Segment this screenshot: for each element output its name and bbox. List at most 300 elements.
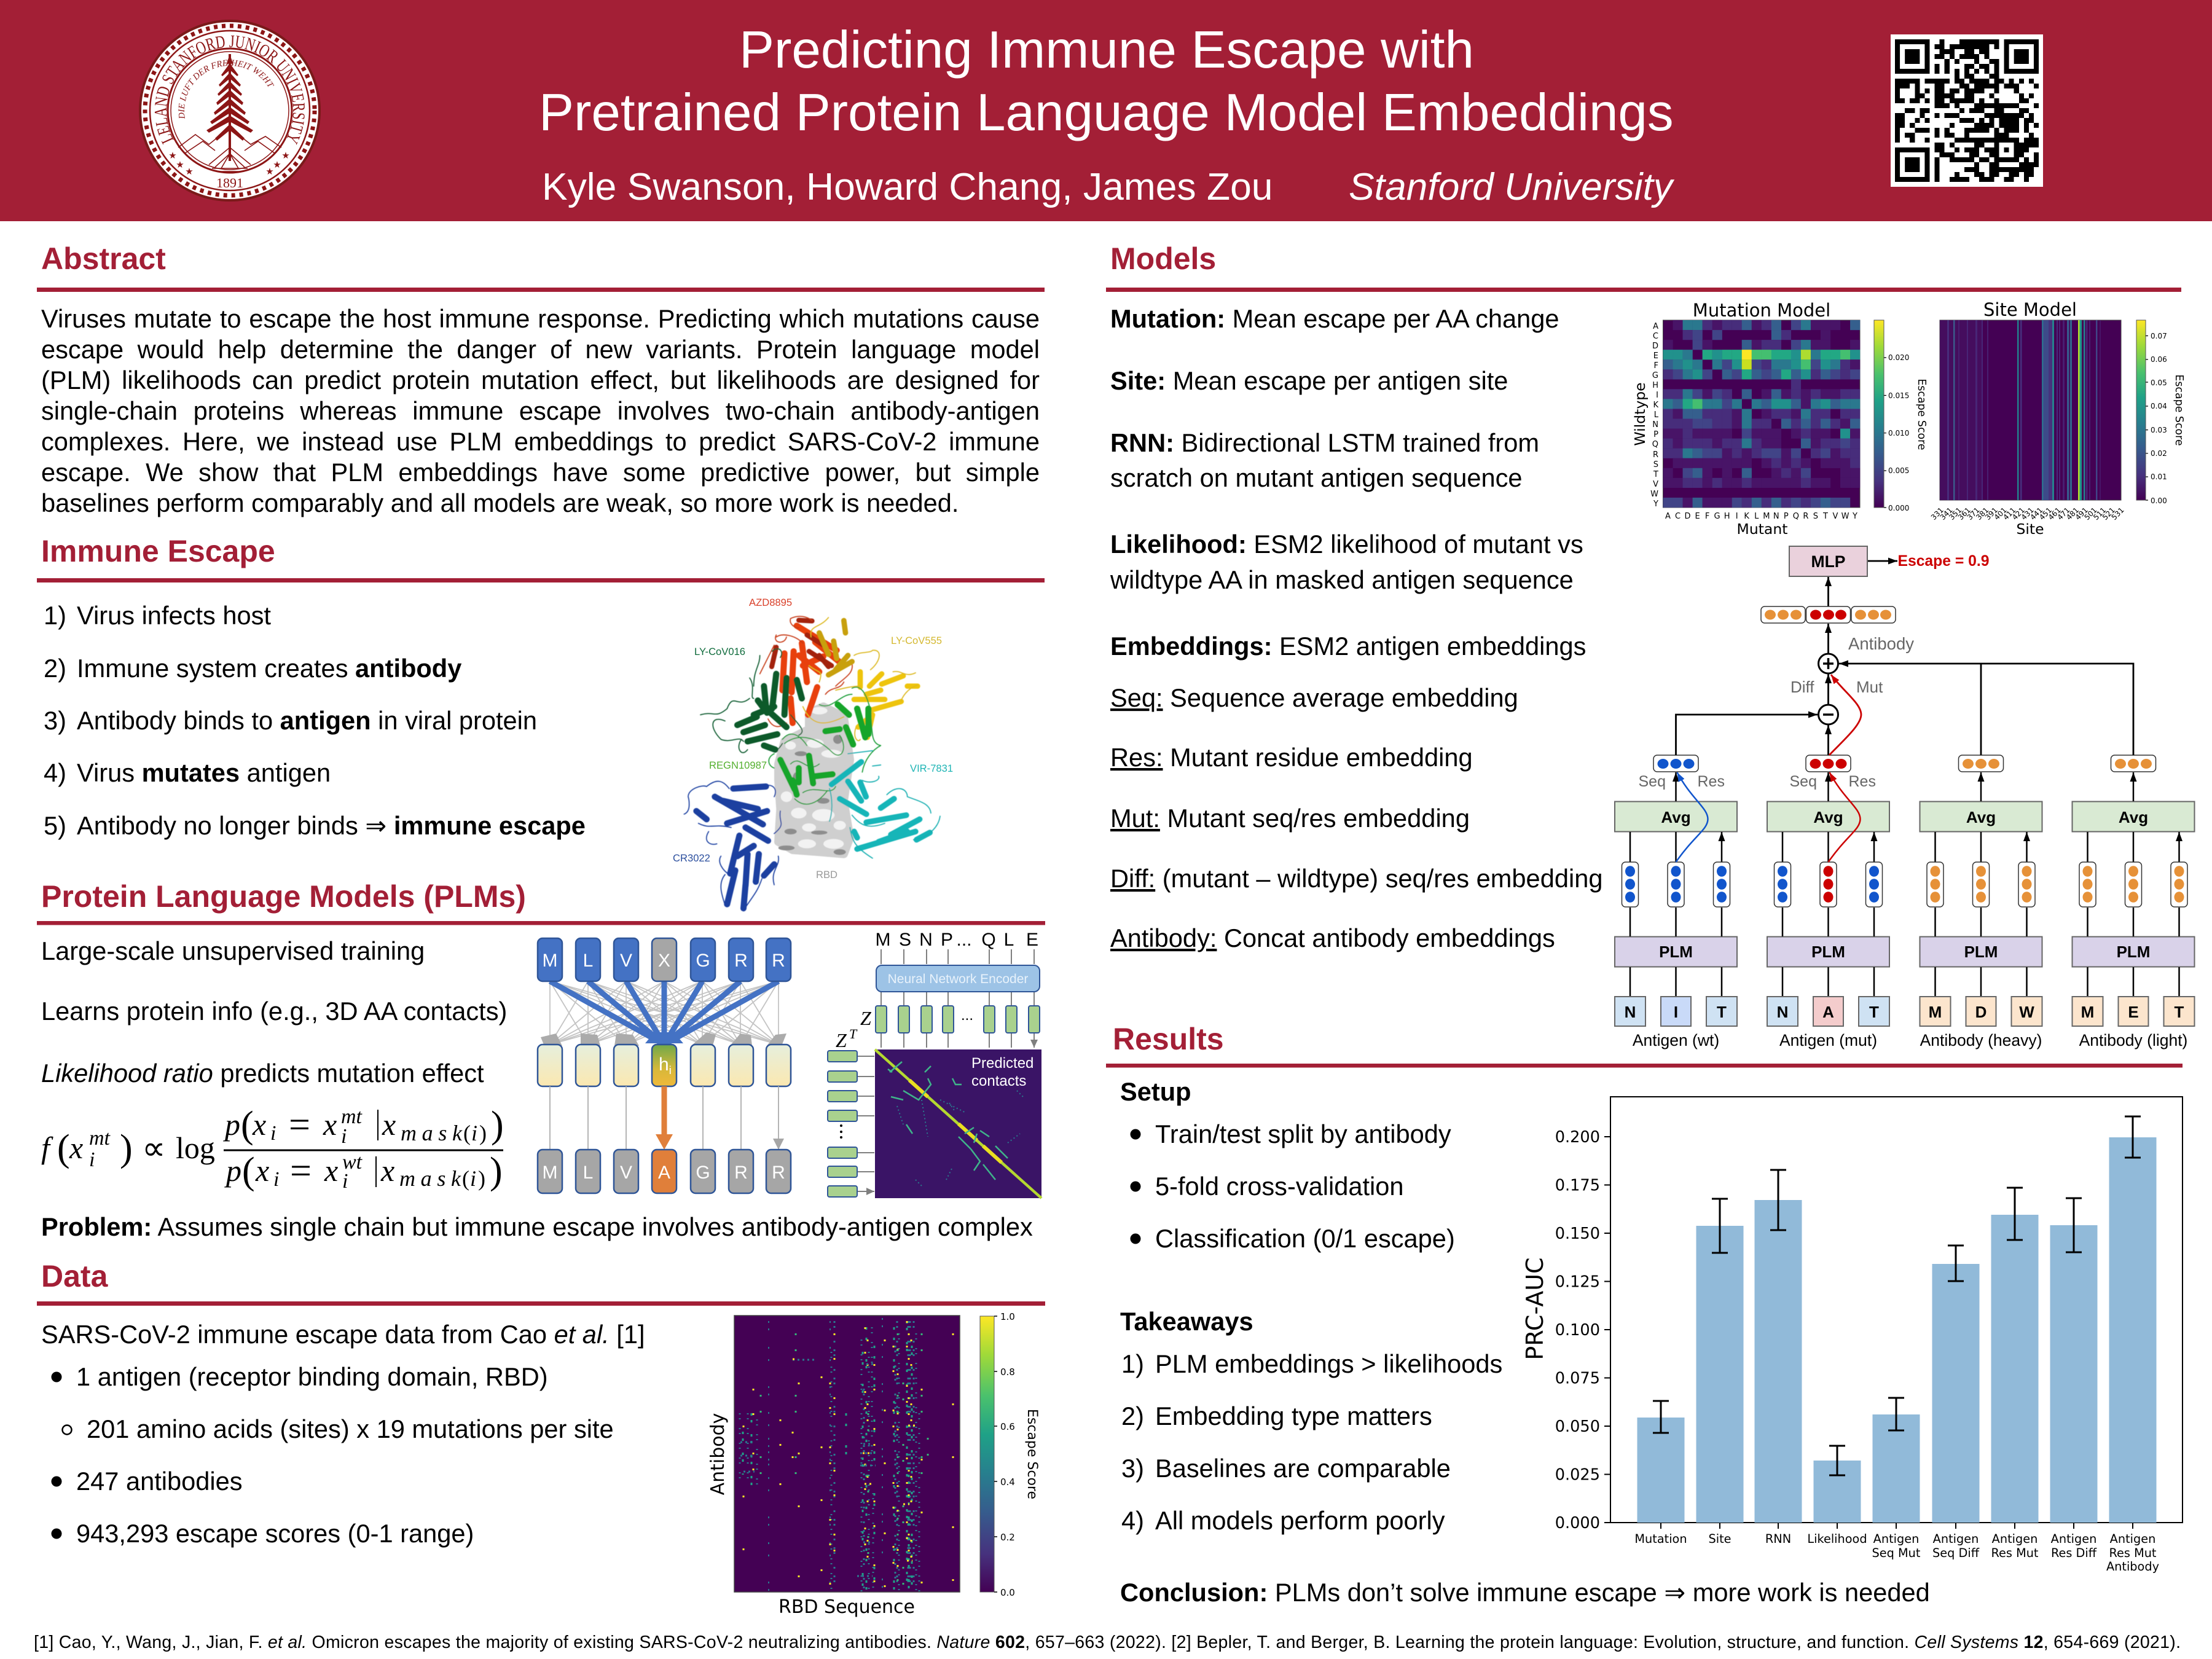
contact map: contacts (971, 1073, 1026, 1089)
formula: likelihood ratio: x (252, 1107, 266, 1142)
colorbar: site model: Escape Score (2173, 374, 2185, 446)
takeaways list: 2) (1121, 1402, 1144, 1430)
escape output: Escape = 0.9 (1897, 553, 1989, 570)
formula: likelihood ratio: x (323, 1107, 337, 1142)
input tokens: G (696, 951, 710, 971)
y axis label: PRC-AUC (1521, 1257, 1548, 1360)
heatmap: site model: 451 (2037, 506, 2053, 522)
column: antigen mutant: Seq (1789, 773, 1817, 790)
heatmap: mutation model: V (1833, 512, 1838, 521)
icon: Stanford seal: ★ (265, 166, 274, 177)
heatmap: mutation model: F (1654, 361, 1658, 371)
colorbar: escape score: 1.0 (1000, 1311, 1015, 1322)
Z labels: Z (836, 1029, 847, 1051)
y tick labels: 0.175 (1555, 1176, 1600, 1194)
Z labels: Z (860, 1007, 872, 1029)
y tick labels: 0.025 (1555, 1466, 1600, 1484)
column: antibody light: Avg (2119, 808, 2148, 826)
colorbar: site model: 0.06 (2151, 355, 2167, 364)
neural network encoder: Neural Network Encoder (888, 972, 1028, 986)
heading: models: Models (1110, 241, 1216, 276)
PLM description: Large-scale unsupervised training (41, 936, 425, 965)
heatmap: mutation model: R (1653, 450, 1658, 460)
formula: likelihood ratio: i (270, 1122, 276, 1145)
operator: subtract (1819, 705, 1838, 724)
panel: abstract (37, 241, 1049, 525)
data description: 1 antigen (receptor binding domain, RBD) (76, 1362, 548, 1391)
sequence letters: S (899, 930, 911, 950)
heatmap: mutation model: D (1684, 512, 1691, 521)
heatmap: mutation model: L (1654, 410, 1659, 420)
formula: likelihood ratio: ( (463, 1121, 471, 1145)
setup list: Train/test split by antibody (1155, 1120, 1451, 1148)
Z labels: T (849, 1026, 858, 1041)
diagram: embedding model architecture (1615, 546, 2195, 1049)
abstract text: complexes. Here, we instead use PLM embeddings to predict SARS-CoV-2 immune (41, 427, 1040, 456)
heatmap: site model: 401 (1993, 506, 2009, 522)
output tokens: R (734, 1163, 748, 1183)
PLM description: Learns protein info (e.g., 3D AA contacts) (41, 997, 507, 1026)
formula: likelihood ratio: mask (401, 1121, 463, 1145)
attention gray links (550, 981, 779, 1045)
heading: data: Data (41, 1259, 109, 1293)
attention arrow heads (541, 1032, 786, 1046)
heatmap: mutation model: G (1714, 512, 1720, 521)
model descriptions: Likelihood: ESM2 likelihood of mutant vs (1110, 530, 1583, 559)
formula: likelihood ratio: i (89, 1148, 95, 1171)
x tick labels: Seq Diff (1932, 1546, 1980, 1560)
heatmap: mutation model (1631, 300, 1860, 538)
colorbar: site model: 0.00 (2151, 496, 2167, 505)
heatmap: mutation model: Q (1793, 512, 1799, 521)
formula: likelihood ratio: x (255, 1153, 269, 1188)
formula: likelihood ratio: x (324, 1153, 338, 1188)
figure: antibody-RBD structure (673, 597, 953, 908)
takeaways list: PLM embeddings > likelihoods (1155, 1349, 1502, 1378)
arrows: combination connectors (1676, 561, 2133, 755)
model descriptions: Mut: Mutant seq/res embedding (1110, 804, 1470, 833)
column: antigen wildtype: Seq (1638, 773, 1666, 790)
structure labels (673, 597, 953, 880)
axis labels: RBD Sequence (779, 1596, 915, 1618)
sequence letters (875, 930, 1038, 950)
encoder arrows (881, 949, 1034, 1048)
title (539, 21, 1674, 142)
heatmap: mutation model: D (1652, 342, 1658, 351)
colorbar: escape score: 0.4 (1000, 1477, 1015, 1488)
protein ribbons and surface (684, 616, 940, 908)
heatmap: site model: 341 (1939, 506, 1955, 522)
heatmap: mutation model: M (1763, 512, 1770, 521)
formula: likelihood ratio: ( (242, 1150, 255, 1192)
x tick labels: Res Mut (1991, 1546, 2039, 1560)
panel: models (1106, 241, 2195, 1049)
formula: likelihood ratio: mask (399, 1166, 461, 1191)
column: antigen mutant: A (1822, 1003, 1834, 1021)
y tick labels: 0.075 (1555, 1369, 1600, 1387)
colorbar: site model: 0.07 (2151, 332, 2167, 340)
formula: likelihood ratio: ) (478, 1166, 485, 1191)
error bars (1653, 1116, 2141, 1475)
hidden states (538, 1045, 791, 1086)
immune escape steps: Antibody no longer binds ⇒ immune escape (77, 811, 586, 840)
heatmap: mutation model: S (1653, 460, 1658, 469)
sequence letters: E (1026, 930, 1038, 950)
heatmap: mutation model: P (1784, 512, 1789, 521)
formula: likelihood ratio: i (470, 1166, 476, 1191)
immune escape steps: Antibody binds to antigen in viral protein (77, 706, 537, 735)
colorbar: site model: 0.02 (2151, 449, 2167, 458)
column: antigen mutant: T (1869, 1003, 1879, 1021)
affiliation: Stanford University (1349, 166, 1675, 208)
y tick labels: 0.000 (1555, 1514, 1600, 1532)
structure labels: REGN10987 (709, 759, 767, 771)
immune escape steps: 5) (44, 811, 66, 840)
formula: likelihood ratio: ) (491, 1104, 504, 1146)
model descriptions: Seq: Sequence average embedding (1110, 683, 1518, 712)
panel: protein language models (37, 879, 1045, 1241)
formula: likelihood ratio: log (176, 1131, 215, 1165)
input tokens: X (658, 951, 670, 971)
title: Predicting Immune Escape with (739, 21, 1474, 79)
icon: Stanford seal: ★ (176, 159, 184, 170)
heatmap: mutation model: L (1754, 512, 1759, 521)
Z transpose embeddings (828, 1051, 874, 1197)
takeaways list (1120, 1307, 1502, 1535)
sequence letters: N (919, 930, 933, 950)
x tick labels: Seq Mut (1872, 1546, 1921, 1560)
heatmap: mutation model: F (1705, 512, 1709, 521)
formula: likelihood ratio: ( (241, 1104, 254, 1146)
heatmap: site model: 481 (2065, 506, 2081, 522)
input tokens (538, 938, 791, 981)
column: antibody heavy: Avg (1966, 808, 1996, 826)
model descriptions: Antibody: Concat antibody embeddings (1110, 924, 1555, 952)
model descriptions: Res: Mutant residue embedding (1110, 743, 1473, 772)
title: Pretrained Protein Language Model Embeddings (539, 84, 1674, 142)
icon: Stanford seal: LELAND STANFORD JUNIOR UNIVERSITY (155, 36, 305, 145)
heatmap: mutation model: Mutant (1737, 520, 1787, 538)
input tokens: R (734, 951, 748, 971)
colorbar: escape score: 0.2 (1000, 1532, 1015, 1543)
output tokens: L (583, 1163, 593, 1183)
heatmap: site model: 531 (2110, 506, 2126, 522)
immune escape steps: 3) (44, 706, 66, 735)
formula: likelihood ratio: ( (57, 1128, 70, 1169)
formula: likelihood ratio: i (471, 1121, 477, 1145)
heading: PLMs: Protein Language Models (PLMs) (41, 879, 526, 914)
x tick labels: Res Mut (2109, 1546, 2157, 1560)
column: antigen wildtype: Res (1697, 773, 1725, 790)
takeaways list: All models perform poorly (1155, 1506, 1445, 1535)
formula: likelihood ratio: = (290, 1150, 312, 1192)
column: antigen wildtype (1615, 755, 1737, 1049)
heatmap: site model (1929, 299, 2126, 538)
x tick labels: RNN (1765, 1532, 1791, 1546)
formula: likelihood ratio (41, 1104, 504, 1193)
column: antigen wildtype: Avg (1661, 808, 1691, 826)
data description: 943,293 escape scores (0-1 range) (76, 1519, 474, 1548)
output tokens: R (772, 1163, 785, 1183)
column: antibody heavy: Antibody (heavy) (1920, 1031, 2042, 1049)
y tick labels: 0.125 (1555, 1273, 1600, 1292)
model descriptions (1110, 304, 1602, 952)
heatmap: site model: Site Model (1983, 299, 2077, 320)
output arrows (550, 1086, 779, 1150)
connector labels (1790, 634, 1914, 696)
y ticks (1604, 1137, 2133, 1529)
heatmap: site model: 491 (2074, 506, 2090, 522)
takeaways list: Embedding type matters (1155, 1402, 1432, 1430)
x tick labels: Mutation (1634, 1532, 1687, 1546)
takeaways list: Takeaways (1120, 1307, 1253, 1336)
icon: Stanford seal: ★ (185, 166, 194, 177)
formula: likelihood ratio: ∝ (142, 1130, 166, 1167)
heatmap: mutation model: Y (1653, 500, 1658, 509)
y tick labels (1555, 1128, 1600, 1532)
heatmap: mutation model: K (1744, 512, 1749, 521)
colorbar: site model: 0.03 (2151, 426, 2167, 434)
immune escape steps: Virus mutates antigen (77, 758, 331, 787)
sequence letters: L (1004, 930, 1014, 950)
heatmap: mutation model: P (1653, 430, 1658, 439)
PLM problem statement: Problem: Assumes single chain but immune escape involves antibody-antigen complex (41, 1212, 1033, 1241)
heatmap: site model: 351 (1947, 506, 1963, 522)
sequence letters: ... (956, 930, 972, 950)
icon: Stanford seal: ★ (273, 159, 281, 170)
formula: likelihood ratio: mt (89, 1127, 111, 1150)
setup list: Classification (0/1 escape) (1155, 1224, 1455, 1253)
takeaways list: Baselines are comparable (1155, 1454, 1451, 1483)
column: antigen mutant: Avg (1813, 808, 1843, 826)
heatmap: site model: 471 (2055, 506, 2072, 522)
formula: likelihood ratio: p (224, 1153, 241, 1188)
y tick labels: 0.050 (1555, 1418, 1600, 1436)
column: antigen mutant: Res (1848, 773, 1876, 790)
data description: SARS-CoV-2 immune escape data from Cao et al. [1] (41, 1320, 645, 1349)
column: antibody light: T (2175, 1003, 2184, 1021)
model descriptions: Mutation: Mean escape per AA change (1110, 304, 1559, 333)
column: antibody heavy: PLM (1964, 943, 1998, 961)
PLM description: Likelihood ratio predicts mutation effect (41, 1059, 484, 1088)
abstract text: single-chain proteins whereas immune escape involves two-chain antibody-antigen (41, 396, 1040, 425)
immune escape steps: 2) (44, 654, 66, 683)
colorbar: mutation model: 0.020 (1888, 353, 1909, 362)
input tokens: M (542, 951, 558, 971)
formula: likelihood ratio: ) (479, 1121, 487, 1145)
x tick labels (1634, 1532, 2159, 1574)
column: antigen wildtype: T (1717, 1003, 1727, 1021)
concatenated embedding (1761, 606, 1896, 623)
heatmap: site model: 441 (2028, 506, 2044, 522)
icon: Stanford seal: 1891 (216, 175, 243, 190)
formula: likelihood ratio: f (41, 1131, 53, 1165)
heatmap: site model: 421 (2010, 506, 2026, 522)
heatmap: site model: 431 (2020, 506, 2036, 522)
heatmap: site model: Site (2016, 520, 2044, 538)
column: antigen mutant (1767, 755, 1889, 1049)
column: antigen wildtype: I (1674, 1003, 1678, 1021)
contact map: Predicted (971, 1055, 1033, 1072)
abstract text: (PLM) likelihoods can predict protein mutation effect, but likelihoods are designed for (41, 366, 1040, 394)
structure labels: RBD (816, 869, 837, 880)
colorbar: site model: 0.05 (2151, 378, 2167, 387)
x tick labels: Site (1708, 1532, 1732, 1546)
heatmap: mutation model: S (1813, 512, 1818, 521)
heatmap: site model: 511 (2092, 506, 2108, 522)
structure labels: CR3022 (673, 852, 710, 864)
heatmap: mutation model: V (1653, 480, 1658, 489)
model descriptions: scratch on mutant antigen sequence (1110, 463, 1523, 492)
colorbar: site model (2136, 320, 2185, 505)
formula: likelihood ratio: x (69, 1131, 83, 1165)
structure labels: AZD8895 (749, 597, 792, 608)
icon: Stanford seal: ★ (168, 150, 177, 161)
colorbar: escape score: 0.8 (1000, 1367, 1015, 1378)
structure labels: VIR-7831 (910, 763, 953, 774)
abstract text: Viruses mutate to escape the host immune response. Predicting which mutations cause (41, 304, 1040, 333)
operator: concat (1819, 654, 1838, 673)
heatmap: mutation model: E (1653, 351, 1658, 361)
heatmap: mutation model: I (1656, 391, 1658, 400)
panel: results (1106, 1022, 2183, 1607)
figure: attention masked language model (538, 938, 791, 1193)
takeaways list: 3) (1121, 1454, 1144, 1483)
sequence letters: Q (981, 930, 996, 950)
connector labels: Mut (1856, 678, 1883, 696)
column: antigen mutant: PLM (1811, 943, 1845, 961)
y tick labels: 0.150 (1555, 1225, 1600, 1243)
authors: Kyle Swanson, Howard Chang, James Zou (542, 166, 1273, 208)
heatmap: site model: 521 (2101, 506, 2117, 522)
x tick labels: Antibody (2106, 1559, 2159, 1574)
x tick labels: Res Diff (2051, 1546, 2097, 1560)
heatmap: site model: 411 (2001, 506, 2017, 522)
heatmap: site model: 461 (2047, 506, 2063, 522)
PLM description (41, 936, 507, 1088)
column: antibody light (2072, 755, 2195, 1049)
connector labels: Diff (1790, 678, 1814, 696)
x tick labels: Antigen (1933, 1532, 1979, 1546)
model descriptions: Embeddings: ESM2 antigen embeddings (1110, 632, 1586, 661)
model descriptions: RNN: Bidirectional LSTM trained from (1110, 428, 1539, 457)
sequence letters: P (941, 930, 953, 950)
setup list: 5-fold cross-validation (1155, 1172, 1404, 1201)
x tick labels: Antigen (1873, 1532, 1919, 1546)
heatmap: mutation model: N (1773, 512, 1779, 521)
heatmap: mutation model: N (1652, 420, 1658, 429)
MLP block: MLP (1811, 552, 1845, 571)
formula: likelihood ratio: x (382, 1107, 396, 1142)
colorbar: mutation model: 0.000 (1888, 504, 1909, 512)
formula: likelihood ratio: wt (342, 1151, 363, 1174)
input tokens: L (583, 951, 593, 971)
colorbar: escape score: 0.6 (1000, 1421, 1015, 1432)
immune escape steps: 4) (44, 758, 66, 787)
heatmap: mutation model: I (1736, 512, 1738, 521)
contact map (875, 1049, 1041, 1198)
output tokens (538, 1150, 791, 1193)
data description: 247 antibodies (76, 1467, 243, 1496)
Z labels: ... (961, 1007, 973, 1024)
y tick labels: 0.100 (1555, 1321, 1600, 1339)
heatmap: site model: 331 (1929, 506, 1945, 522)
colorbar: mutation model (1874, 320, 1928, 512)
axis frame (1610, 1097, 2183, 1523)
x tick labels: Antigen (2110, 1532, 2155, 1546)
heatmap: mutation model: Wildtype (1631, 382, 1649, 446)
Z labels (836, 1007, 973, 1051)
axis labels: Escape Score (1024, 1409, 1040, 1499)
references footer: [1] Cao, Y., Wang, J., Jian, F. et al. Omicron escapes the majority of existing SARS-CoV-2 neutralizing antibodies. Nature 602, 657–663 (2022). [2] Bepler, T. and Berger, B. Learning the protein language: Evolution, structure, and function. Cell Systems 12, 654-669 (2021). (34, 1633, 2181, 1652)
heatmap: mutation model: C (1675, 512, 1681, 521)
heatmap: mutation model: T (1653, 470, 1658, 479)
figure: contact prediction (828, 930, 1041, 1198)
column: antigen wildtype: N (1625, 1003, 1636, 1021)
column: antibody heavy: M (1929, 1003, 1942, 1021)
header banner (0, 0, 2212, 221)
output tokens: V (620, 1163, 632, 1183)
formula: likelihood ratio: ) (120, 1128, 133, 1169)
heatmap: mutation model: H (1724, 512, 1730, 521)
formula: likelihood ratio: p (223, 1107, 240, 1142)
column: antigen wildtype: PLM (1659, 943, 1693, 961)
heatmap: mutation model: W (1650, 490, 1658, 499)
panel: immune escape (37, 534, 1045, 908)
model descriptions: wildtype AA in masked antigen sequence (1110, 565, 1574, 594)
connector labels: Antibody (1848, 634, 1914, 653)
colorbar: mutation model: 0.005 (1888, 466, 1909, 475)
neural network encoder (876, 965, 1040, 992)
sequence letters: M (875, 930, 891, 950)
heatmap: mutation model: E (1695, 512, 1700, 521)
colorbar: mutation model: 0.015 (1888, 391, 1909, 400)
hidden state label: h (659, 1054, 669, 1075)
MLP block (1789, 546, 1867, 576)
heading: abstract: Abstract (41, 241, 166, 276)
heatmap: mutation model: T (1822, 512, 1828, 521)
structure labels: LY-CoV016 (694, 646, 745, 657)
formula: likelihood ratio: ) (490, 1150, 503, 1192)
heatmap: mutation model: Q (1652, 440, 1658, 449)
heading: immune escape: Immune Escape (41, 534, 275, 568)
abstract text: baselines perform comparably and all models are weak, so more work is needed. (41, 488, 959, 517)
heatmap: mutation model: W (1841, 512, 1849, 521)
colorbar: mutation model: Escape Score (1915, 378, 1928, 450)
axis labels (707, 1409, 1040, 1618)
abstract text: escape would help determine the danger of new variants. Protein language model (41, 335, 1040, 364)
bars (1637, 1137, 2157, 1523)
conclusion: Conclusion: PLMs don’t solve immune escape ⇒ more work is needed (1120, 1578, 1930, 1607)
immune escape steps: 1) (44, 601, 66, 630)
column: antibody light: Antibody (light) (2079, 1031, 2187, 1049)
setup list: Setup (1120, 1077, 1191, 1106)
colorbar: site model: 0.01 (2151, 473, 2167, 481)
column: antibody heavy (1920, 755, 2042, 1049)
colorbar: escape score (980, 1311, 1015, 1598)
formula: likelihood ratio: i (341, 1125, 347, 1148)
column: antibody light: M (2081, 1003, 2094, 1021)
model descriptions: Diff: (mutant – wildtype) seq/res embedding (1110, 864, 1602, 893)
abstract text: escape. We show that PLM embeddings have some predictive power, but simple (41, 458, 1040, 487)
heatmap: mutation model: C (1653, 332, 1658, 341)
data description: 201 amino acids (sites) x 19 mutations per site (87, 1414, 614, 1443)
panel: data (37, 1259, 1045, 1618)
column: antibody heavy: W (2019, 1003, 2034, 1021)
heatmap: site model: 381 (1974, 506, 1990, 522)
bar chart: PRC-AUC by model (1521, 1097, 2183, 1574)
heatmap: site model: 361 (1956, 506, 1972, 522)
